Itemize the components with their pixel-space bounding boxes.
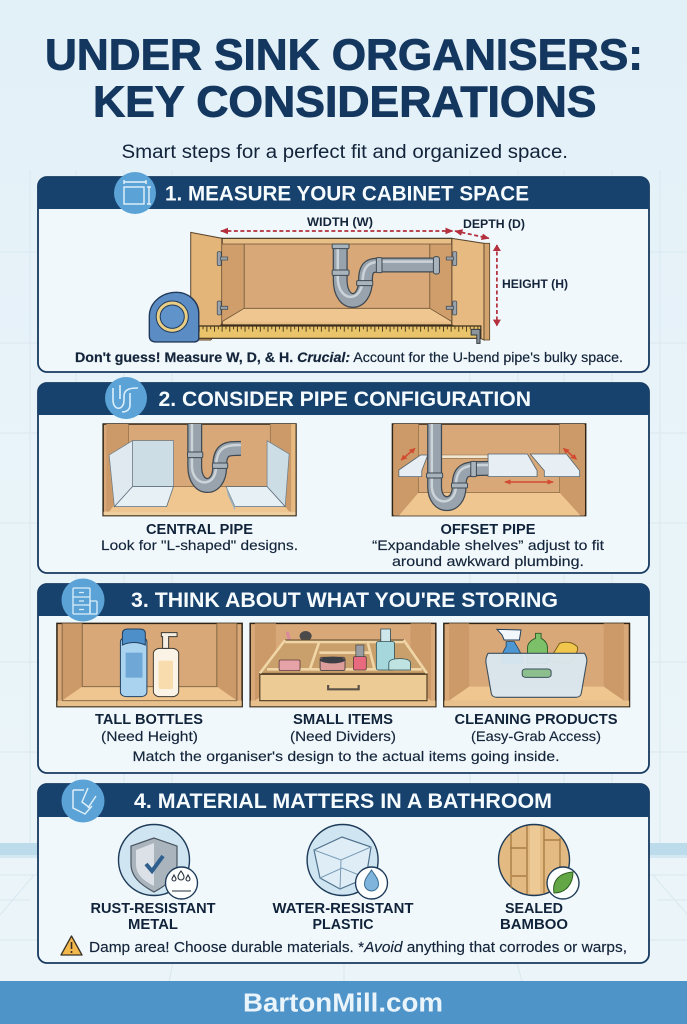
label: height: HEIGHT (H) [502, 277, 568, 291]
rust-resistant metal text: RUST-RESISTANT [90, 901, 216, 917]
tall bottles text: TALL BOTTLES [95, 712, 203, 728]
offset pipe text: “Expandable shelves” adjust to fit [372, 537, 604, 553]
illustration: central pipe with L-shaped shelves [103, 424, 296, 516]
dimension arrows [221, 231, 497, 326]
illustration: tall bottles [57, 623, 242, 707]
tall bottles text [95, 712, 203, 744]
icon: drawers [62, 578, 104, 622]
sealed bamboo text: SEALED [505, 901, 563, 917]
heading 3: 3. THINK ABOUT WHAT YOU'RE STORING [131, 588, 558, 612]
water-resistant plastic text [272, 901, 414, 933]
cleaning products text: (Easy-Grab Access) [471, 728, 601, 744]
icon: warning triangle [61, 936, 82, 955]
sealed bamboo text: BAMBOO [500, 917, 568, 933]
icon: sealed bamboo [498, 824, 579, 899]
heading 2: 2. CONSIDER PIPE CONFIGURATION [158, 387, 531, 411]
cleaning products text [454, 712, 618, 744]
panel: 1. measure your cabinet space [38, 172, 649, 372]
icon: material swatch [62, 780, 104, 822]
subtitle: Smart steps for a perfect fit and organized space. [122, 142, 568, 163]
central pipe text [101, 522, 298, 553]
illustration: cleaning products basket [444, 623, 629, 707]
heading 4: 4. MATERIAL MATTERS IN A BATHROOM [134, 789, 552, 813]
small items text: (Need Dividers) [290, 728, 396, 744]
title: KEY CONSIDERATIONS [93, 78, 596, 126]
panel: 4. material matters in a bathroom [38, 780, 649, 963]
central pipe text: CENTRAL PIPE [146, 522, 253, 538]
sealed bamboo text [500, 901, 568, 933]
icon: pipes [105, 377, 147, 419]
footer bar: BartonMill.com [243, 990, 443, 1018]
heading 1: 1. MEASURE YOUR CABINET SPACE [165, 182, 529, 206]
illustration: offset pipe with expandable shelves [392, 424, 586, 516]
water-resistant plastic text: PLASTIC [312, 917, 374, 933]
label: depth: DEPTH (D) [463, 217, 525, 231]
rust-resistant metal text [90, 901, 216, 933]
illustration: open cabinet with pipe and tape measure [149, 232, 490, 343]
footer bar [0, 981, 687, 1024]
water-resistant plastic text: WATER-RESISTANT [272, 901, 414, 917]
caption 1: Don't guess! Measure W, D, & H. Crucial: Account for the U-bend pipe's bulky space. [75, 349, 623, 365]
offset pipe text [372, 522, 604, 569]
cleaning products text: CLEANING PRODUCTS [454, 712, 618, 728]
icon: cabinet measure [114, 172, 156, 214]
offset pipe text: around awkward plumbing. [392, 553, 584, 569]
illustration: small items organiser [250, 623, 436, 707]
offset pipe text: OFFSET PIPE [440, 522, 536, 538]
small items text: SMALL ITEMS [293, 712, 393, 728]
caption 3: Match the organiser's design to the actual items going inside. [132, 748, 560, 764]
rust-resistant metal text: METAL [128, 917, 178, 933]
icon: rust-resistant metal shield [118, 824, 198, 899]
label: width: WIDTH (W) [307, 215, 373, 229]
panel: 3. think about what you're storing [38, 578, 649, 773]
title [45, 30, 643, 126]
panel: 2. consider pipe configuration [38, 377, 649, 573]
caption 4: Damp area! Choose durable materials. * Avoid anything that corrodes or warps, [89, 940, 627, 956]
icon: water-resistant plastic tub [307, 824, 388, 899]
small items text [290, 712, 396, 744]
central pipe text: Look for "L-shaped" designs. [101, 537, 298, 553]
tall bottles text: (Need Height) [101, 728, 198, 744]
title: UNDER SINK ORGANISERS: [45, 30, 643, 80]
